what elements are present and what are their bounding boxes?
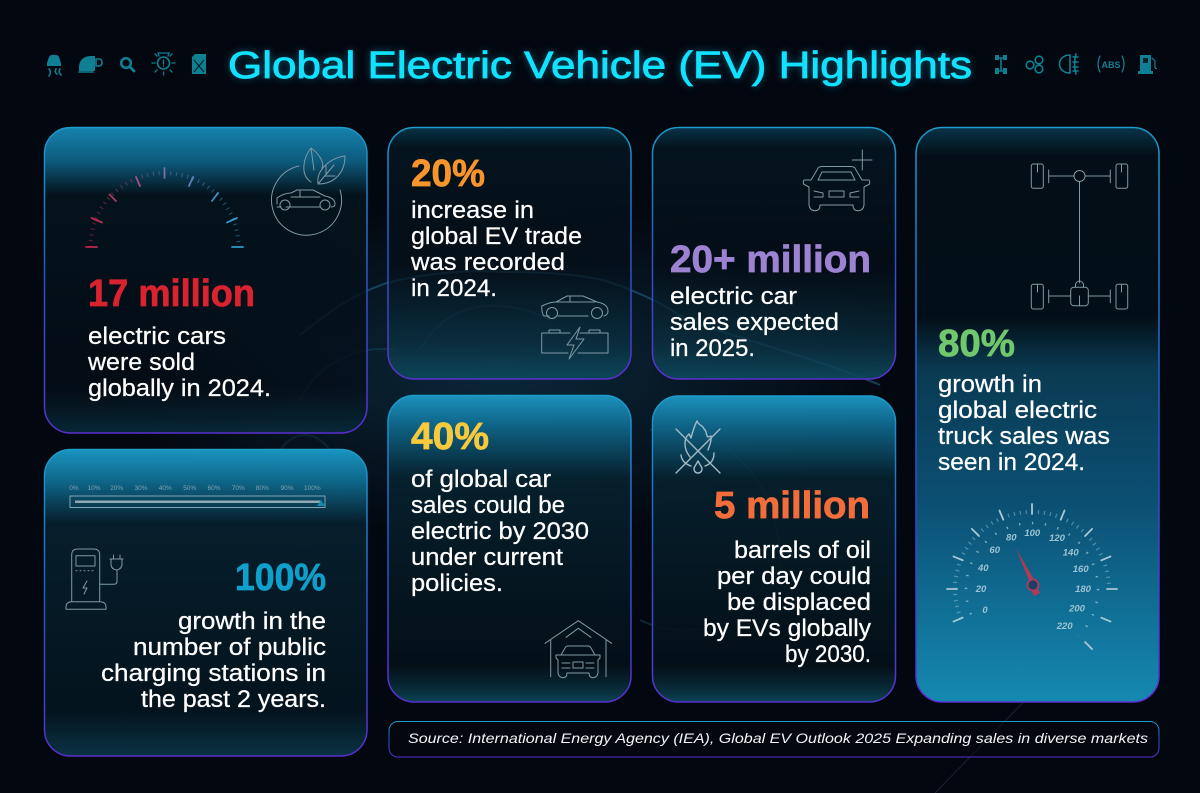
- panel: 5 million: [652, 396, 896, 702]
- chart: speedometer: 220: [1056, 621, 1073, 632]
- description: seen in 2024.: [938, 449, 1085, 476]
- icon: charging station: [66, 549, 123, 609]
- chart: progress bar: 100%: [304, 485, 321, 492]
- chart: gauge arc: [86, 168, 243, 247]
- icon: skid control: [47, 55, 61, 76]
- description: increase in: [411, 197, 534, 224]
- description: sales could be: [411, 492, 565, 519]
- chart: speedometer: 120: [1049, 533, 1066, 544]
- description: truck sales was: [938, 423, 1110, 450]
- stat: 5 million: [714, 485, 870, 527]
- icon: warning light: [152, 53, 175, 75]
- description: policies.: [411, 570, 503, 597]
- icon: car and battery: [542, 296, 608, 359]
- description: charging stations in: [101, 660, 326, 687]
- description: [411, 466, 589, 597]
- stat: 20+ million: [670, 239, 871, 281]
- icon: ABS: ABS: [1101, 60, 1121, 70]
- description: global electric: [938, 397, 1097, 424]
- source note: [389, 722, 1159, 757]
- chart: speedometer: [947, 504, 1117, 649]
- description: growth in the: [178, 608, 326, 635]
- icon: magnifier: [121, 58, 134, 71]
- chart: progress bar: 50%: [183, 485, 196, 492]
- description: [87, 323, 271, 402]
- left dashboard icons: [47, 53, 206, 76]
- description: electric by 2030: [411, 518, 589, 545]
- icon: chassis: [1031, 164, 1128, 309]
- chart: progress bar: 0%: [69, 485, 79, 492]
- card background: [916, 128, 1159, 702]
- description: growth in: [938, 371, 1042, 398]
- chart: progress bar: 70%: [232, 485, 245, 492]
- icon: fog light: [1060, 54, 1078, 74]
- chart: speedometer: 160: [1073, 564, 1089, 575]
- stat: 80%: [938, 323, 1015, 365]
- panel: 100%: [44, 450, 367, 756]
- stat: 100%: [235, 557, 326, 599]
- description: [938, 371, 1110, 476]
- card background: [652, 396, 896, 702]
- card background: [652, 128, 896, 379]
- card background: [44, 128, 367, 433]
- panel: 40%: [388, 396, 631, 702]
- chart: progress bar: 60%: [207, 485, 221, 492]
- chart: speedometer: 100: [1024, 528, 1041, 539]
- icon: fuel can: [192, 54, 206, 74]
- description: be displaced: [727, 589, 871, 616]
- stat: 40%: [411, 416, 489, 458]
- description: by EVs globally: [703, 615, 871, 642]
- chart: progress bar: 20%: [110, 485, 123, 492]
- icon: car plus: [803, 150, 872, 211]
- chart: speedometer: 20: [975, 584, 987, 595]
- icon: no fire: [676, 421, 720, 473]
- description: electric cars: [88, 323, 226, 350]
- chart: speedometer: 80: [1006, 532, 1017, 544]
- description: electric car: [670, 283, 797, 310]
- description: per day could: [717, 563, 871, 590]
- stat: 20%: [411, 153, 485, 195]
- description: under current: [411, 544, 563, 571]
- chart: progress bar: 90%: [280, 485, 294, 492]
- chart: speedometer: 200: [1068, 604, 1086, 614]
- card background: [388, 128, 631, 379]
- description: in 2025.: [670, 335, 755, 362]
- icon: linked circles: [1026, 56, 1043, 73]
- description: the past 2 years.: [141, 686, 326, 713]
- chart: speedometer: 0: [982, 605, 988, 616]
- chart: progress bar: 30%: [134, 485, 148, 492]
- icon: eco car: [272, 148, 345, 235]
- chart: progress bar: 10%: [87, 485, 101, 492]
- title: Global Electric Vehicle (EV) Highlights: [228, 45, 972, 87]
- chart: progress bar: [69, 485, 325, 508]
- description: by 2030.: [785, 641, 871, 668]
- description: were sold: [87, 349, 195, 376]
- description: [101, 608, 326, 713]
- card background: [388, 396, 631, 702]
- chart: speedometer: 180: [1075, 584, 1092, 595]
- description: [670, 283, 839, 362]
- chart: speedometer: 40: [977, 563, 989, 574]
- icon: glow plug: [79, 56, 102, 72]
- icon: garage car: [545, 621, 612, 678]
- description: was recorded: [410, 249, 565, 276]
- panel: 20%: [388, 128, 631, 379]
- right dashboard icons: [995, 54, 1156, 74]
- panel: 17 million: [44, 128, 367, 433]
- description: barrels of oil: [734, 537, 871, 564]
- chart: progress bar: 80%: [256, 485, 269, 492]
- chart: speedometer: 60: [989, 545, 1001, 556]
- description: number of public: [133, 634, 326, 661]
- chart: progress bar: 40%: [159, 485, 172, 492]
- panel: 80%: [916, 128, 1159, 702]
- description: sales expected: [670, 309, 839, 336]
- description: globally in 2024.: [88, 375, 271, 402]
- chart: speedometer: 140: [1063, 548, 1079, 558]
- description: [410, 197, 582, 302]
- description: global EV trade: [411, 223, 582, 250]
- icon: drivetrain: [995, 55, 1007, 74]
- description: of global car: [411, 466, 551, 493]
- stat: 17 million: [88, 273, 255, 315]
- icon: fuel pump: [1138, 55, 1156, 74]
- panel: 20+ million: [652, 128, 896, 379]
- description: in 2024.: [411, 275, 497, 302]
- description: [703, 537, 871, 668]
- source note: Source: International Energy Agency (IEA), Global EV Outlook 2025 Expanding sales in diverse markets: [408, 730, 1148, 746]
- icon: ABS: [1098, 56, 1124, 72]
- card background: [44, 450, 367, 756]
